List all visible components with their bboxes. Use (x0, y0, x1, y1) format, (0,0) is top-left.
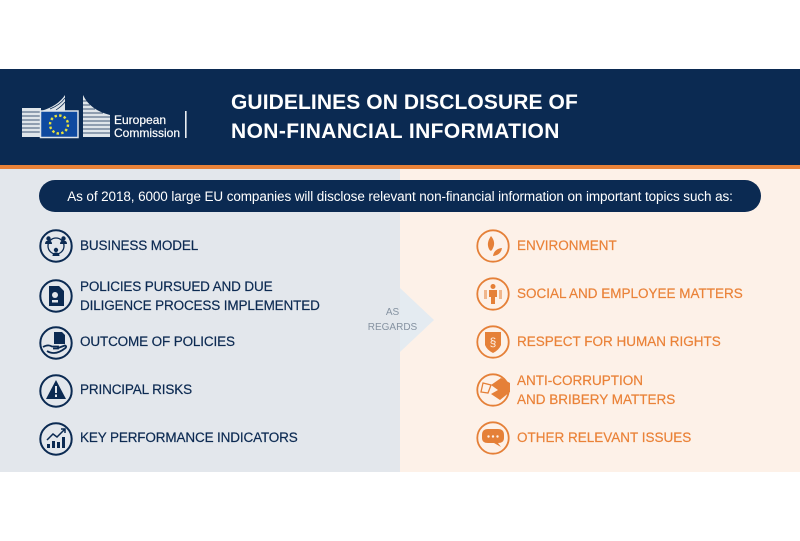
icon: human rights shield (476, 325, 510, 359)
label: outcome of policies: OUTCOME OF POLICIES (80, 334, 235, 349)
label: business model: BUSINESS MODEL (80, 238, 198, 253)
icon: handshake (476, 373, 510, 407)
as regards arrow (400, 288, 434, 352)
intro pill: As of 2018, 6000 large EU companies will disclose relevant non-financial information on important topics such as: (67, 189, 733, 204)
label: environment: ENVIRONMENT (517, 238, 617, 253)
logo: European Commission: Commission (114, 126, 180, 140)
label: respect for human rights: RESPECT FOR HUMAN RIGHTS (517, 334, 721, 349)
label: key performance indicators: KEY PERFORMANCE INDICATORS (80, 430, 298, 445)
as regards label: REGARDS (368, 322, 417, 333)
orange header rule (0, 165, 800, 169)
as regards label: AS (386, 307, 399, 318)
title (231, 91, 578, 143)
icon: business model (39, 229, 73, 263)
title: NON-FINANCIAL INFORMATION (231, 120, 560, 143)
title: GUIDELINES ON DISCLOSURE OF (231, 91, 578, 114)
icon: policies document (39, 279, 73, 313)
label: policies pursued (80, 279, 320, 313)
label: other relevant issues: OTHER RELEVANT ISSUES (517, 430, 691, 445)
icon: speech bubble (476, 421, 510, 455)
icon: environment leaf (476, 229, 510, 263)
intro pill (39, 180, 761, 212)
header band (0, 69, 800, 165)
logo: European Commission (22, 95, 187, 140)
label: policies pursued: POLICIES PURSUED AND DUE (80, 279, 272, 294)
icon: outcome hand (39, 326, 73, 360)
label: social and employee matters: SOCIAL AND EMPLOYEE MATTERS (517, 286, 743, 301)
label: anti-corruption and bribery matters: ANTI-CORRUPTION (517, 373, 643, 388)
icon: warning triangle (39, 374, 73, 408)
label: anti-corruption and bribery matters: AND BRIBERY MATTERS (517, 392, 675, 407)
logo: European Commission: European (114, 113, 166, 127)
icon: social people (476, 277, 510, 311)
label: policies pursued: DILIGENCE PROCESS IMPLEMENTED (80, 298, 320, 313)
label: principal risks: PRINCIPAL RISKS (80, 382, 192, 397)
icon: human rights shield: § (490, 335, 496, 349)
left panel background (0, 169, 400, 472)
as regards label (368, 307, 417, 333)
label: anti-corruption and bribery matters (516, 373, 675, 407)
right panel background (400, 169, 800, 472)
icon: bar chart (39, 422, 73, 456)
